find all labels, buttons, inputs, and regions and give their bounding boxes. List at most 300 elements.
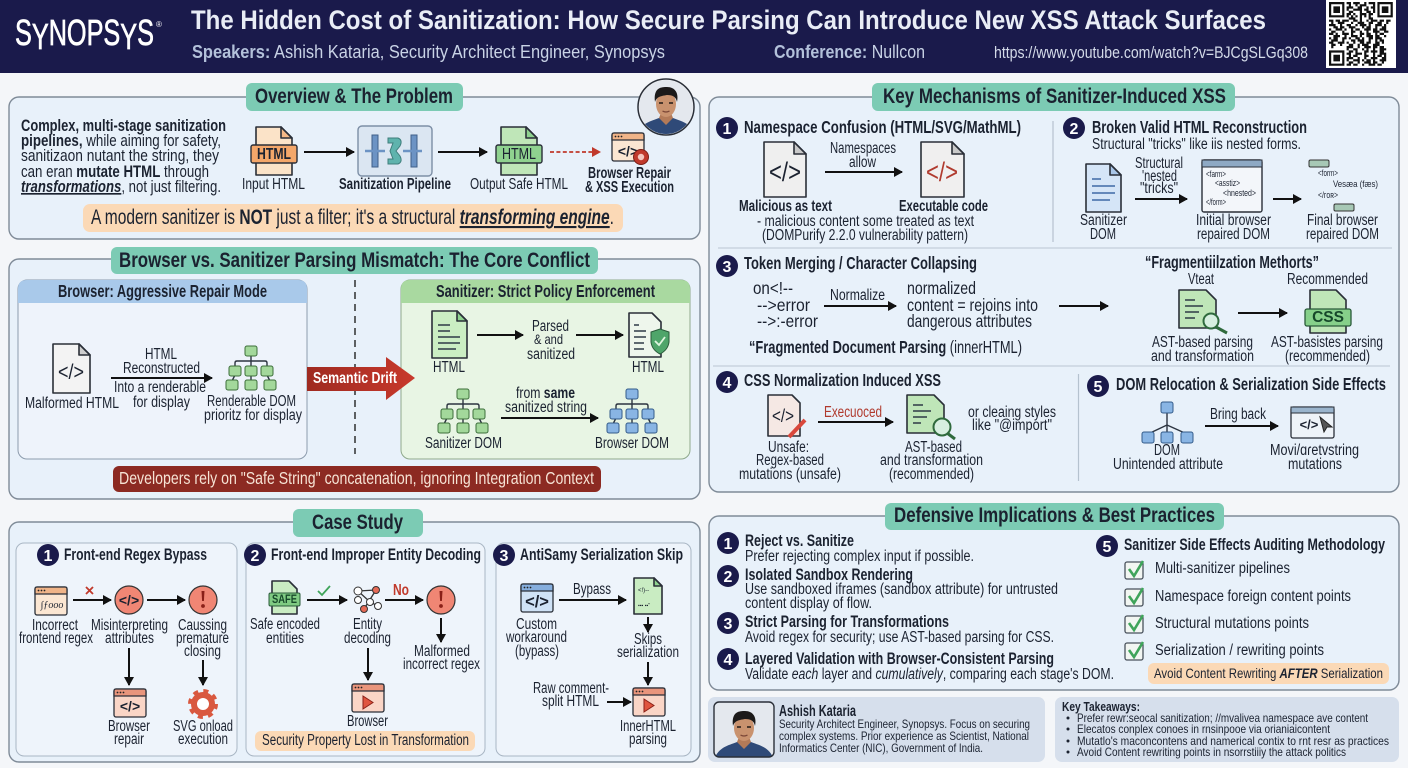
practice 3: Avoid regex for security; use AST-based parsing for CSS. xyxy=(745,629,1054,646)
arrow with executed: Execuoced xyxy=(824,404,882,421)
labels: AST parsing xyxy=(1151,334,1383,365)
icon: alert xyxy=(189,586,217,614)
normalized note xyxy=(907,278,1038,331)
label: skips serialization: serialization xyxy=(617,644,679,661)
checklist item 1: Multi-sanitizer pipelines xyxy=(1155,560,1290,577)
labels: regex vs AST: Regex-based xyxy=(756,452,824,469)
icon: output safe HTML: HTML xyxy=(502,146,536,163)
arrow: semantic drift: Semantic Drift xyxy=(313,370,397,387)
labels: repaired DOMs xyxy=(1196,212,1379,243)
note: nested tricks: Structural xyxy=(1135,155,1183,172)
labels: custom workaround: (bypass) xyxy=(515,643,559,660)
labels: regex vs AST: (recommended) xyxy=(889,466,974,483)
label: sanitizer DOM: Sanitizer DOM xyxy=(425,435,502,452)
labels: outcomes: SVG onload xyxy=(173,718,233,735)
checklist item 1 xyxy=(1125,560,1290,579)
labels: regex vs AST: mutations (unsafe) xyxy=(739,466,841,483)
arrow xyxy=(607,701,631,703)
panel: Key Mechanisms xyxy=(709,83,1399,492)
labels: entity flow: decoding xyxy=(344,630,391,647)
column labels xyxy=(1188,271,1368,288)
logo: Synopsys xyxy=(15,12,162,57)
normalized note: content = rejoins into xyxy=(907,295,1038,315)
mechanism 2: broken valid HTML reconstruction: Structural "tricks" like iis nested forms. xyxy=(1092,136,1301,153)
note: cleaning styles: or cleaing styles xyxy=(968,404,1056,421)
arrow with Bypass xyxy=(559,581,626,600)
icon: safe doc: SAFE xyxy=(272,592,297,606)
case 3: AntiSamy serialization skip xyxy=(493,543,691,756)
label: skips serialization xyxy=(617,631,679,661)
arrow: dashed red xyxy=(550,151,600,153)
labels: repaired DOMs: repaired DOM xyxy=(1306,226,1379,243)
icon: browser play window xyxy=(352,684,384,712)
labels: regex vs AST: and transformation xyxy=(880,452,983,469)
arrow xyxy=(147,599,185,601)
callout: security property lost: Security Property Lost in Transformation xyxy=(262,732,469,749)
icon: AST doc with magnifier xyxy=(1179,290,1227,333)
icon: malformed HTML: </> xyxy=(58,361,84,384)
labels: custom workaround: workaround xyxy=(505,629,567,646)
icon: final DOM snippet: <form> xyxy=(1318,168,1338,179)
case 1: front-end regex bypass xyxy=(16,543,237,756)
labels: regex flow: closing xyxy=(184,643,221,660)
mechanism 4: CSS normalization: 4 xyxy=(723,375,732,392)
column labels: Recommended xyxy=(1287,271,1368,288)
icon: executable doc xyxy=(921,142,964,197)
practice 5: auditing checklist xyxy=(1096,535,1389,684)
practice 1: 1 xyxy=(724,536,733,553)
icon: initial DOM window: <hnested> xyxy=(1223,188,1256,199)
labels: AST parsing: AST-based parsing xyxy=(1152,334,1253,351)
label: string mutations xyxy=(1270,442,1359,473)
labels: regex flow: Caussing xyxy=(178,617,227,634)
sub-panel: browser repair mode: Browser: Aggressive Repair Mode xyxy=(58,281,267,301)
flow note: reconstructed: for display xyxy=(133,394,190,411)
labels: custom workaround xyxy=(505,616,567,660)
panel: Defensive Implications xyxy=(709,503,1399,690)
heading: mismatch: Browser vs. Sanitizer Parsing Mismatch: The Core Conflict xyxy=(119,249,590,272)
label: innerHTML parsing: parsing xyxy=(629,731,667,748)
icon: CSS doc xyxy=(1305,290,1351,333)
icon: renderable DOM tree xyxy=(226,346,276,390)
practice 1: Reject vs. Sanitize xyxy=(745,532,854,550)
labels: regex flow: attributes xyxy=(105,630,154,647)
flow note: same sanitized string: sanitized string xyxy=(505,399,587,416)
labels: repaired DOMs: repaired DOM xyxy=(1197,226,1270,243)
practice 2: Isolated Sandbox Rendering xyxy=(745,566,913,584)
intro text: Complex, multi-stage sanitization xyxy=(21,117,226,135)
labels: regex vs AST: Unsafe: xyxy=(768,439,809,456)
label: raw comment-split HTML: Raw comment- xyxy=(533,680,609,697)
labels: regex flow: Incorrect xyxy=(32,617,79,634)
QR code xyxy=(1326,0,1396,68)
checklist item 4 xyxy=(1125,642,1324,660)
practice 1 xyxy=(717,532,974,565)
icon: misinterpreting: </> xyxy=(119,592,139,608)
practice 5: auditing checklist: 5 xyxy=(1103,539,1112,556)
panel: Browser vs. Sanitizer Parsing Mismatch xyxy=(9,247,700,499)
speaker name: Ashish Kataria xyxy=(779,703,856,720)
arrow down xyxy=(647,617,649,632)
note: namespaces allow: Namespaces xyxy=(830,140,896,157)
practice 2: Use sandboxed iframes (sandbox attribute) for untrusted xyxy=(745,581,1058,598)
icon: initial DOM window xyxy=(1202,160,1262,212)
note: nested tricks: "tricks" xyxy=(1140,180,1178,197)
mechanism 2: broken valid HTML reconstruction xyxy=(1063,117,1379,243)
label: string mutations: Movi/ɑɾetvstring xyxy=(1270,442,1359,459)
label: browser: Browser xyxy=(347,713,388,730)
heading: defensive implications: Defensive Implications & Best Practices xyxy=(894,504,1215,527)
arrow with Normalize: Normalize xyxy=(830,287,885,304)
mechanism 2: broken valid HTML reconstruction: Broken Valid HTML Reconstruction xyxy=(1092,117,1307,137)
icon: sanitizer DOM tree xyxy=(438,389,488,433)
practice 3: Strict Parsing for Transformations xyxy=(745,613,949,631)
fragmented parsing label: “Fragmented Document Parsing (innerHTML) xyxy=(749,337,1022,357)
label: renderable DOM: Renderable DOM xyxy=(207,393,296,410)
sub-panel: browser repair mode xyxy=(18,280,307,459)
label: output safe HTML: Output Safe HTML xyxy=(470,176,568,193)
logo: Synopsys: S xyxy=(137,12,154,53)
takeaways list: Avoid Content rewriting points in nsorrstiiiy the attack politics xyxy=(1077,745,1346,759)
label: renderable DOM xyxy=(204,393,302,424)
arrow down xyxy=(367,648,369,680)
labels: regex flow: premature xyxy=(176,630,229,647)
normalized note: normalized xyxy=(907,278,976,298)
callout: safe string xyxy=(113,466,601,492)
icon: browser repair window: </> xyxy=(120,698,140,714)
sub-panel: sanitizer strict policy xyxy=(401,280,690,459)
labels: custom workaround: Custom xyxy=(516,616,557,633)
speaker avatar xyxy=(637,78,695,136)
logo: Synopsys: Y xyxy=(32,16,49,57)
icon: mutation window xyxy=(1291,407,1334,438)
callout: security property lost xyxy=(255,731,475,751)
takeaways list: Elecatos conplex conoes in rnsinpooe via orianiaicontent xyxy=(1077,722,1331,736)
normalized note: dangerous attributes xyxy=(907,311,1032,331)
intro text: pipelines, while aiming for safety, xyxy=(21,132,221,150)
conference: Conference: Nullcon xyxy=(774,42,925,62)
labels: regex flow xyxy=(19,617,229,660)
description: (DOMPurify 2.2.0 vulnerability pattern) xyxy=(762,227,968,244)
icon: final DOM snippet: Vesæa (fæs) xyxy=(1333,179,1378,190)
note: cleaning styles xyxy=(968,404,1056,434)
mechanism 3: token merging xyxy=(716,252,1383,365)
icon: HTML document xyxy=(432,311,467,358)
logo: Synopsys: NOPS xyxy=(49,12,120,53)
arrow xyxy=(304,151,354,153)
logo: Synopsys: Y xyxy=(120,16,137,57)
heading: case study xyxy=(293,509,423,537)
arrow xyxy=(501,417,598,419)
speaker bio: Security Architect Engineer, Synopsys. Focus on securing xyxy=(779,717,1030,731)
arrow with No xyxy=(385,582,423,600)
practice 4 xyxy=(717,648,1114,683)
takeaways list xyxy=(1066,711,1389,759)
key takeaways card xyxy=(1055,697,1399,762)
label: unintended attribute xyxy=(1113,442,1223,473)
labels: outcomes xyxy=(108,718,233,748)
icon: unsafe doc with pencil xyxy=(768,395,805,437)
label: raw comment-split HTML xyxy=(533,680,609,710)
practice 3 xyxy=(717,612,1054,646)
flow note: reconstructed: Into a renderable xyxy=(114,379,206,396)
arrow with bring back: Bring back xyxy=(1210,406,1266,423)
arrow with red cross xyxy=(73,587,111,600)
icon: code doc: </> xyxy=(769,157,801,187)
case 2: improper entity decoding: 2 xyxy=(251,548,260,565)
speaker bio xyxy=(779,717,1030,755)
code sample: -->error xyxy=(757,295,810,315)
label: sanitizer DOM: DOM xyxy=(1090,226,1116,243)
arrow xyxy=(825,171,902,173)
practice 4: Validate each layer and cumulatively, comparing each stage's DOM. xyxy=(745,666,1114,683)
callout: transforming engine: A modern sanitizer is NOT just a filter; it's a structural transforming engine. xyxy=(91,206,614,229)
arrow down xyxy=(647,662,649,685)
flow note: same sanitized string xyxy=(505,385,587,416)
arrow with check xyxy=(307,586,347,600)
icon: input HTML xyxy=(251,127,297,175)
labels: repaired DOMs: Final browser xyxy=(1307,212,1378,229)
icon: skip doc xyxy=(634,578,662,614)
panel: Case Study xyxy=(9,509,700,762)
icon: custom workaround window: </> xyxy=(525,593,549,611)
code sample: on<!-- xyxy=(753,278,793,298)
labels: entity flow: Safe encoded xyxy=(250,616,320,633)
mechanism 4: CSS normalization xyxy=(716,370,1056,483)
header banner xyxy=(0,0,1408,73)
mechanism 1: namespace confusion: 1 xyxy=(723,121,732,138)
label: sanitization pipeline: Sanitization Pipeline xyxy=(339,176,451,193)
flow note: parsed and sanitized xyxy=(527,318,575,363)
label: unintended attribute: Unintended attribute xyxy=(1113,456,1223,473)
mechanism 3: token merging: Token Merging / Character Collapsing xyxy=(744,253,977,273)
label: browser DOM: Browser DOM xyxy=(595,435,669,452)
flow note: parsed and sanitized: Parsed xyxy=(532,318,569,335)
labels: regex flow: frontend regex xyxy=(19,630,93,647)
icon: browser repair xyxy=(612,133,648,164)
flow note: same sanitized string: from same xyxy=(516,385,575,402)
arrow xyxy=(576,334,623,336)
arrow xyxy=(1273,198,1301,200)
practice 2 xyxy=(717,565,1058,612)
note: nested tricks xyxy=(1135,155,1183,197)
labels: entity flow xyxy=(250,616,480,673)
labels: entity flow: entities xyxy=(266,630,304,647)
heading: Overview xyxy=(246,83,463,111)
icon: output safe HTML xyxy=(496,127,542,175)
label: raw comment-split HTML: split HTML xyxy=(542,693,599,710)
icon: regex window xyxy=(35,587,67,615)
icon: executable doc: </> xyxy=(926,157,958,187)
icon: regex window: ∫ƒooo xyxy=(40,600,63,611)
code sample: -->:-error xyxy=(757,311,818,331)
case 3: AntiSamy serialization skip: AntiSamy Serialization Skip xyxy=(520,546,683,564)
labels: entity flow: Malformed xyxy=(414,643,470,660)
labels: regex vs AST xyxy=(739,439,983,483)
label: browser repair & XSS execution: Browser Repair xyxy=(588,165,671,182)
practice 3: 3 xyxy=(724,616,733,633)
description xyxy=(757,213,975,244)
label: renderable DOM: prioritz for display xyxy=(204,407,302,424)
icon: browser repair window xyxy=(114,689,146,717)
icon: mutation window: </> xyxy=(1300,417,1319,432)
speaker photo xyxy=(713,701,775,758)
video url: https://www.youtube.com/watch?v=BJCgSLGq308 xyxy=(994,44,1308,62)
icon: CSS doc: CSS xyxy=(1312,309,1344,326)
case 1: front-end regex bypass: Front-end Regex Bypass xyxy=(64,546,207,564)
mechanism 3: token merging: 3 xyxy=(723,259,732,276)
labels: doc captions xyxy=(739,198,988,215)
label: HTML: HTML xyxy=(632,359,664,376)
panel: Overview & The Problem xyxy=(9,67,706,239)
label: unintended attribute: DOM xyxy=(1154,442,1180,459)
arrow xyxy=(1135,198,1187,200)
icon: initial DOM window: <asstiz> xyxy=(1215,178,1240,189)
icon: code doc xyxy=(764,142,806,197)
practice 2: content display of flow. xyxy=(745,595,872,612)
labels: regex vs AST: AST-based xyxy=(905,439,962,456)
labels: outcomes: execution xyxy=(178,731,228,748)
mechanism 2: broken valid HTML reconstruction: 2 xyxy=(1070,121,1079,138)
case 1: front-end regex bypass: 1 xyxy=(44,548,53,565)
mechanism 5: DOM relocation: 5 xyxy=(1094,379,1103,396)
icon: innerHTML play window xyxy=(633,688,665,716)
label: string mutations: mutations xyxy=(1288,456,1342,473)
speaker card xyxy=(708,697,1045,762)
note: nested tricks: 'nested xyxy=(1142,168,1177,185)
icon: initial DOM window: <farm> xyxy=(1206,169,1226,180)
arrow with No: No xyxy=(393,582,409,599)
icon: misinterpreting xyxy=(115,586,143,614)
note: cleaning styles: like "@import" xyxy=(972,417,1052,434)
fragmentation heading: “Fragmentiilzation Methorts” xyxy=(1145,252,1319,272)
icon: sanitized doc with shield xyxy=(629,313,669,357)
flow note: parsed and sanitized: sanitized xyxy=(527,346,575,363)
icon: AST doc with magnifier xyxy=(907,395,955,439)
practice 4: 4 xyxy=(724,652,733,669)
note: namespaces allow xyxy=(830,140,896,171)
label: skips serialization: Skips xyxy=(634,631,662,648)
checklist item 2: Namespace foreign content points xyxy=(1155,588,1351,605)
title: The Hidden Cost of Sanitization: How Secure Parsing Can Introduce New XSS Attack Surfaces xyxy=(191,5,1266,35)
label: browser repair & XSS execution: & XSS Execution xyxy=(585,179,674,196)
case 2: improper entity decoding xyxy=(244,543,485,756)
icon: input HTML: HTML xyxy=(257,146,291,163)
description: - malicious content some treated as text xyxy=(757,213,975,230)
mechanism 4: CSS normalization: CSS Normalization Induced XSS xyxy=(744,370,941,390)
heading: key mechanisms: Key Mechanisms of Sanitizer-Induced XSS xyxy=(883,85,1226,108)
icon: browser DOM tree xyxy=(607,389,657,433)
checklist item 3: Structural mutations points xyxy=(1155,615,1309,632)
case 3: AntiSamy serialization skip: 3 xyxy=(500,548,509,565)
labels: doc captions: Malicious as text xyxy=(739,198,832,215)
label: innerHTML parsing xyxy=(620,718,676,748)
code sample xyxy=(753,278,818,331)
labels: AST parsing: (recommended) xyxy=(1285,348,1370,365)
icon: sanitization pipeline xyxy=(358,126,432,176)
intro text: transformations, not just filtering. xyxy=(21,178,221,196)
arrow down xyxy=(440,618,442,642)
mechanism 1: namespace confusion: Namespace Confusion (HTML/SVG/MathML) xyxy=(744,117,1021,137)
flow note: reconstructed: Reconstructed xyxy=(123,360,200,377)
arrow xyxy=(1238,312,1287,314)
arrow down xyxy=(202,660,204,685)
icon: DOM tree xyxy=(1142,402,1193,443)
logo: Synopsys: S xyxy=(15,12,39,53)
heading: key mechanisms xyxy=(872,83,1235,111)
flow note: reconstructed: HTML xyxy=(145,346,177,363)
arrow with Bypass: Bypass xyxy=(573,581,611,598)
icon: skip doc: ▪▪▪ ▪▪" xyxy=(638,603,650,609)
labels: outcomes: Browser xyxy=(108,718,150,735)
mechanism 5: DOM relocation xyxy=(1087,374,1386,473)
arrow xyxy=(477,334,523,336)
icon: final DOM snippet: </ᴦoʀ> xyxy=(1318,190,1338,201)
label: sanitizer DOM xyxy=(1080,212,1127,243)
intro text xyxy=(21,117,226,196)
label: malformed HTML: Malformed HTML xyxy=(25,395,119,412)
practice 4: Layered Validation with Browser-Consistent Parsing xyxy=(745,650,1054,668)
practice 1: Prefer rejecting complex input if possible. xyxy=(745,548,974,565)
icon: initial DOM window: </form> xyxy=(1206,197,1226,208)
icon: entity decoding xyxy=(354,586,382,612)
labels: repaired DOMs: Initial browser xyxy=(1196,212,1271,229)
heading: Overview: Overview & The Problem xyxy=(255,85,453,108)
icon: unsafe doc with pencil: </> xyxy=(772,406,794,426)
callout: avoid content rewriting: Avoid Content Rewriting AFTER Serialization xyxy=(1154,665,1383,681)
label: input HTML: Input HTML xyxy=(242,176,305,193)
icon: malformed HTML xyxy=(53,344,90,393)
arrow down xyxy=(128,648,130,685)
column labels: Vteat xyxy=(1188,271,1214,288)
label: innerHTML parsing: InnerHTML xyxy=(620,718,676,735)
icon: custom workaround window xyxy=(521,584,553,612)
icon: final DOM snippet xyxy=(1309,160,1378,211)
label: browser repair & XSS execution xyxy=(585,165,674,196)
note: namespaces allow: allow xyxy=(849,154,877,171)
icon: safe doc xyxy=(269,581,300,614)
icon: sanitizer DOM doc xyxy=(1086,164,1121,212)
case 2: improper entity decoding: Front-end Improper Entity Decoding xyxy=(271,546,481,564)
labels: outcomes: repair xyxy=(114,731,144,748)
mechanism 1: namespace confusion xyxy=(716,117,1021,244)
labels: doc captions: Executable code xyxy=(899,198,988,215)
sub-panel: sanitizer strict policy: Sanitizer: Strict Policy Enforcement xyxy=(436,281,655,301)
arrow: semantic drift xyxy=(307,357,415,400)
speaker bio: Informatics Center (NIC), Government of India. xyxy=(779,741,983,755)
checklist item 3 xyxy=(1125,615,1309,633)
flow note: reconstructed xyxy=(114,346,206,411)
arrow xyxy=(438,151,487,153)
icon: skip doc: <!)-- xyxy=(638,588,649,594)
label: HTML: HTML xyxy=(433,359,465,376)
callout: safe string: Developers rely on "Safe String" concatenation, ignoring Integration Context xyxy=(119,468,594,488)
flow note: parsed and sanitized: & and xyxy=(534,331,563,347)
intro text: sanitizaon nutant the string, they xyxy=(21,147,220,165)
icon: browser repair: </> xyxy=(618,143,638,159)
icon: gear xyxy=(190,691,216,717)
speaker bio: complex systems. Prior experience as Scientist, National xyxy=(779,729,1029,743)
speakers: Speakers: Ashish Kataria, Security Architect Engineer, Synopsys xyxy=(192,42,665,62)
checklist item 4: Serialization / rewriting points xyxy=(1155,642,1324,659)
takeaways heading: Key Takeaways: xyxy=(1062,699,1140,714)
arrow xyxy=(111,377,212,379)
labels: regex flow: Misinterpreting xyxy=(91,617,168,634)
labels: entity flow: incorrect regex xyxy=(403,656,480,673)
labels: AST parsing: and transformation xyxy=(1151,348,1254,365)
practice 2: 2 xyxy=(724,569,733,586)
icon: alert xyxy=(427,586,455,614)
